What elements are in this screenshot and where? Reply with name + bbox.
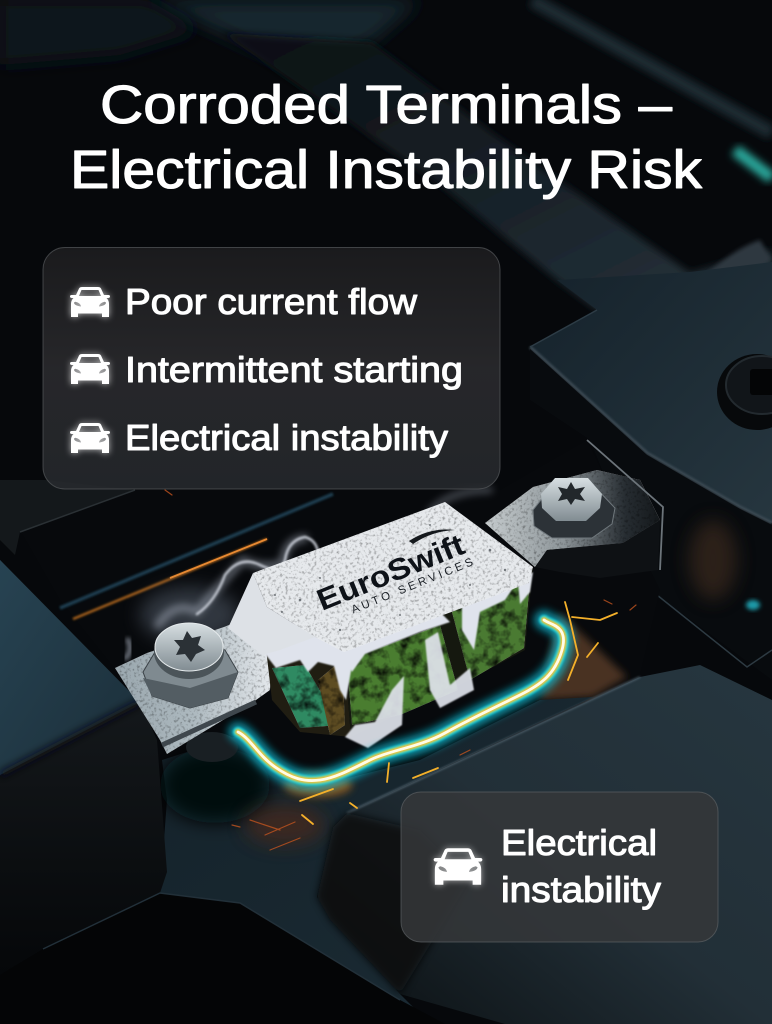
block logo: EuroSwift <box>312 528 469 617</box>
logo swoosh <box>409 529 455 544</box>
corroded terminal block <box>228 502 533 748</box>
smoke wisps <box>126 490 490 658</box>
panel: symptoms list <box>43 248 500 489</box>
lower pocket <box>0 893 445 1024</box>
top face <box>253 502 533 652</box>
lower right panel surface <box>317 665 772 1024</box>
floor surface <box>160 675 640 1024</box>
right battery block top <box>530 262 772 523</box>
block logo: AUTO SERVICES <box>350 556 477 616</box>
electric arc <box>165 490 636 850</box>
title: Electrical Instability Risk <box>70 140 703 200</box>
green corrosion patches <box>272 580 530 735</box>
right terminal strap and bolt <box>485 440 663 578</box>
title <box>70 75 703 200</box>
callout text <box>501 822 661 910</box>
specks <box>274 524 506 631</box>
tray <box>20 440 660 810</box>
item: electrical instability: Electrical instability <box>125 417 448 458</box>
callout text: Electrical <box>501 822 657 863</box>
white drips <box>252 572 533 748</box>
sparks <box>300 602 617 824</box>
icon: car <box>434 848 482 885</box>
title: Corroded Terminals – <box>100 75 672 135</box>
left terminal strap and bolt <box>115 612 272 754</box>
item: poor current flow: Poor current flow <box>125 281 418 322</box>
block faces <box>265 640 351 737</box>
upper blurred housing <box>148 0 420 70</box>
right block front <box>530 349 772 680</box>
callout text: instability <box>501 869 661 910</box>
item: intermittent starting: Intermittent starting <box>125 349 463 390</box>
callout: electrical instability <box>401 792 718 942</box>
left block <box>0 560 167 975</box>
white spill on strap <box>228 573 315 655</box>
screw <box>717 354 772 430</box>
